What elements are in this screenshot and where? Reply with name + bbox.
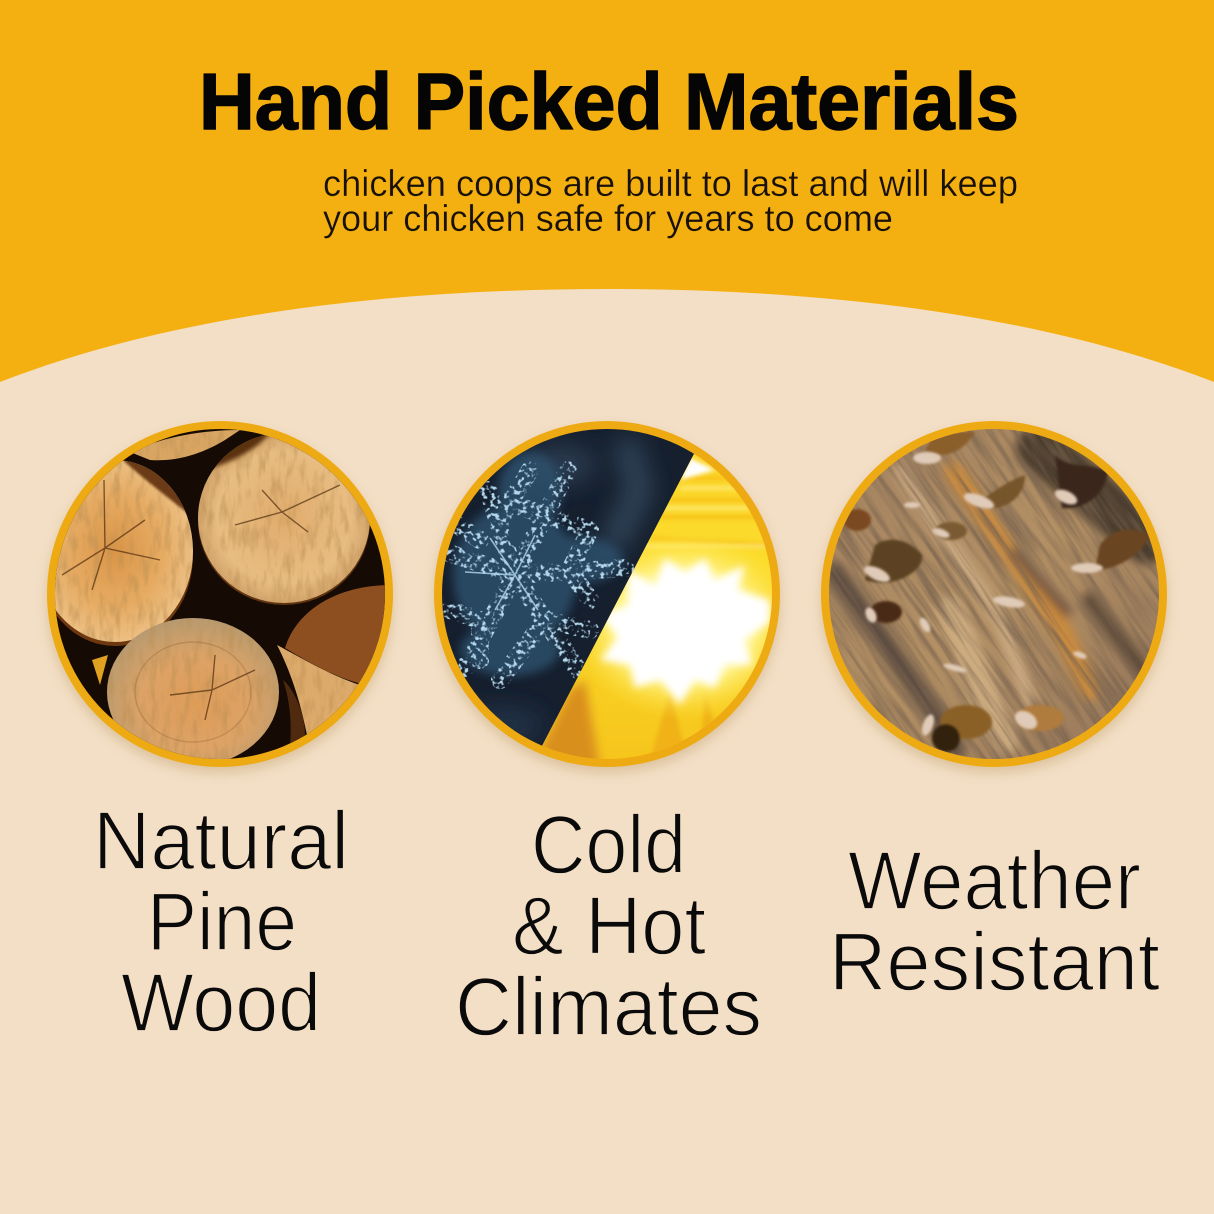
panel: cold and hot climates <box>434 421 800 1053</box>
label: weather resistant: Weather <box>848 834 1141 927</box>
subtitle <box>323 163 1018 239</box>
label: cold and hot climates: Climates <box>455 960 762 1053</box>
beige curved panel <box>0 289 1214 1214</box>
icon: snowflake and sun photo <box>434 421 800 773</box>
droplet highlights <box>862 452 1103 737</box>
label: weather resistant <box>829 834 1160 1008</box>
label: cold and hot climates <box>455 798 762 1053</box>
yellow header background <box>0 0 1214 400</box>
label: natural pine wood <box>93 794 349 1049</box>
title: Hand Picked Materials <box>199 57 1019 146</box>
label: natural pine wood: Wood <box>121 956 321 1049</box>
label: cold and hot climates: Cold <box>531 798 686 891</box>
label: cold and hot climates: & Hot <box>512 879 706 972</box>
subtitle: your chicken safe for years to come <box>323 198 893 239</box>
label: natural pine wood: Natural <box>93 794 349 887</box>
subtitle: chicken coops are built to last and will keep <box>323 163 1018 204</box>
label: weather resistant: Resistant <box>829 915 1160 1008</box>
panel: weather resistant <box>816 421 1172 990</box>
water droplets <box>843 432 1150 752</box>
icon: stacked logs photo <box>37 421 393 773</box>
panel: natural pine wood <box>37 421 393 1049</box>
icon: wet wood photo <box>816 421 1172 778</box>
label: natural pine wood: Pine <box>147 875 297 968</box>
